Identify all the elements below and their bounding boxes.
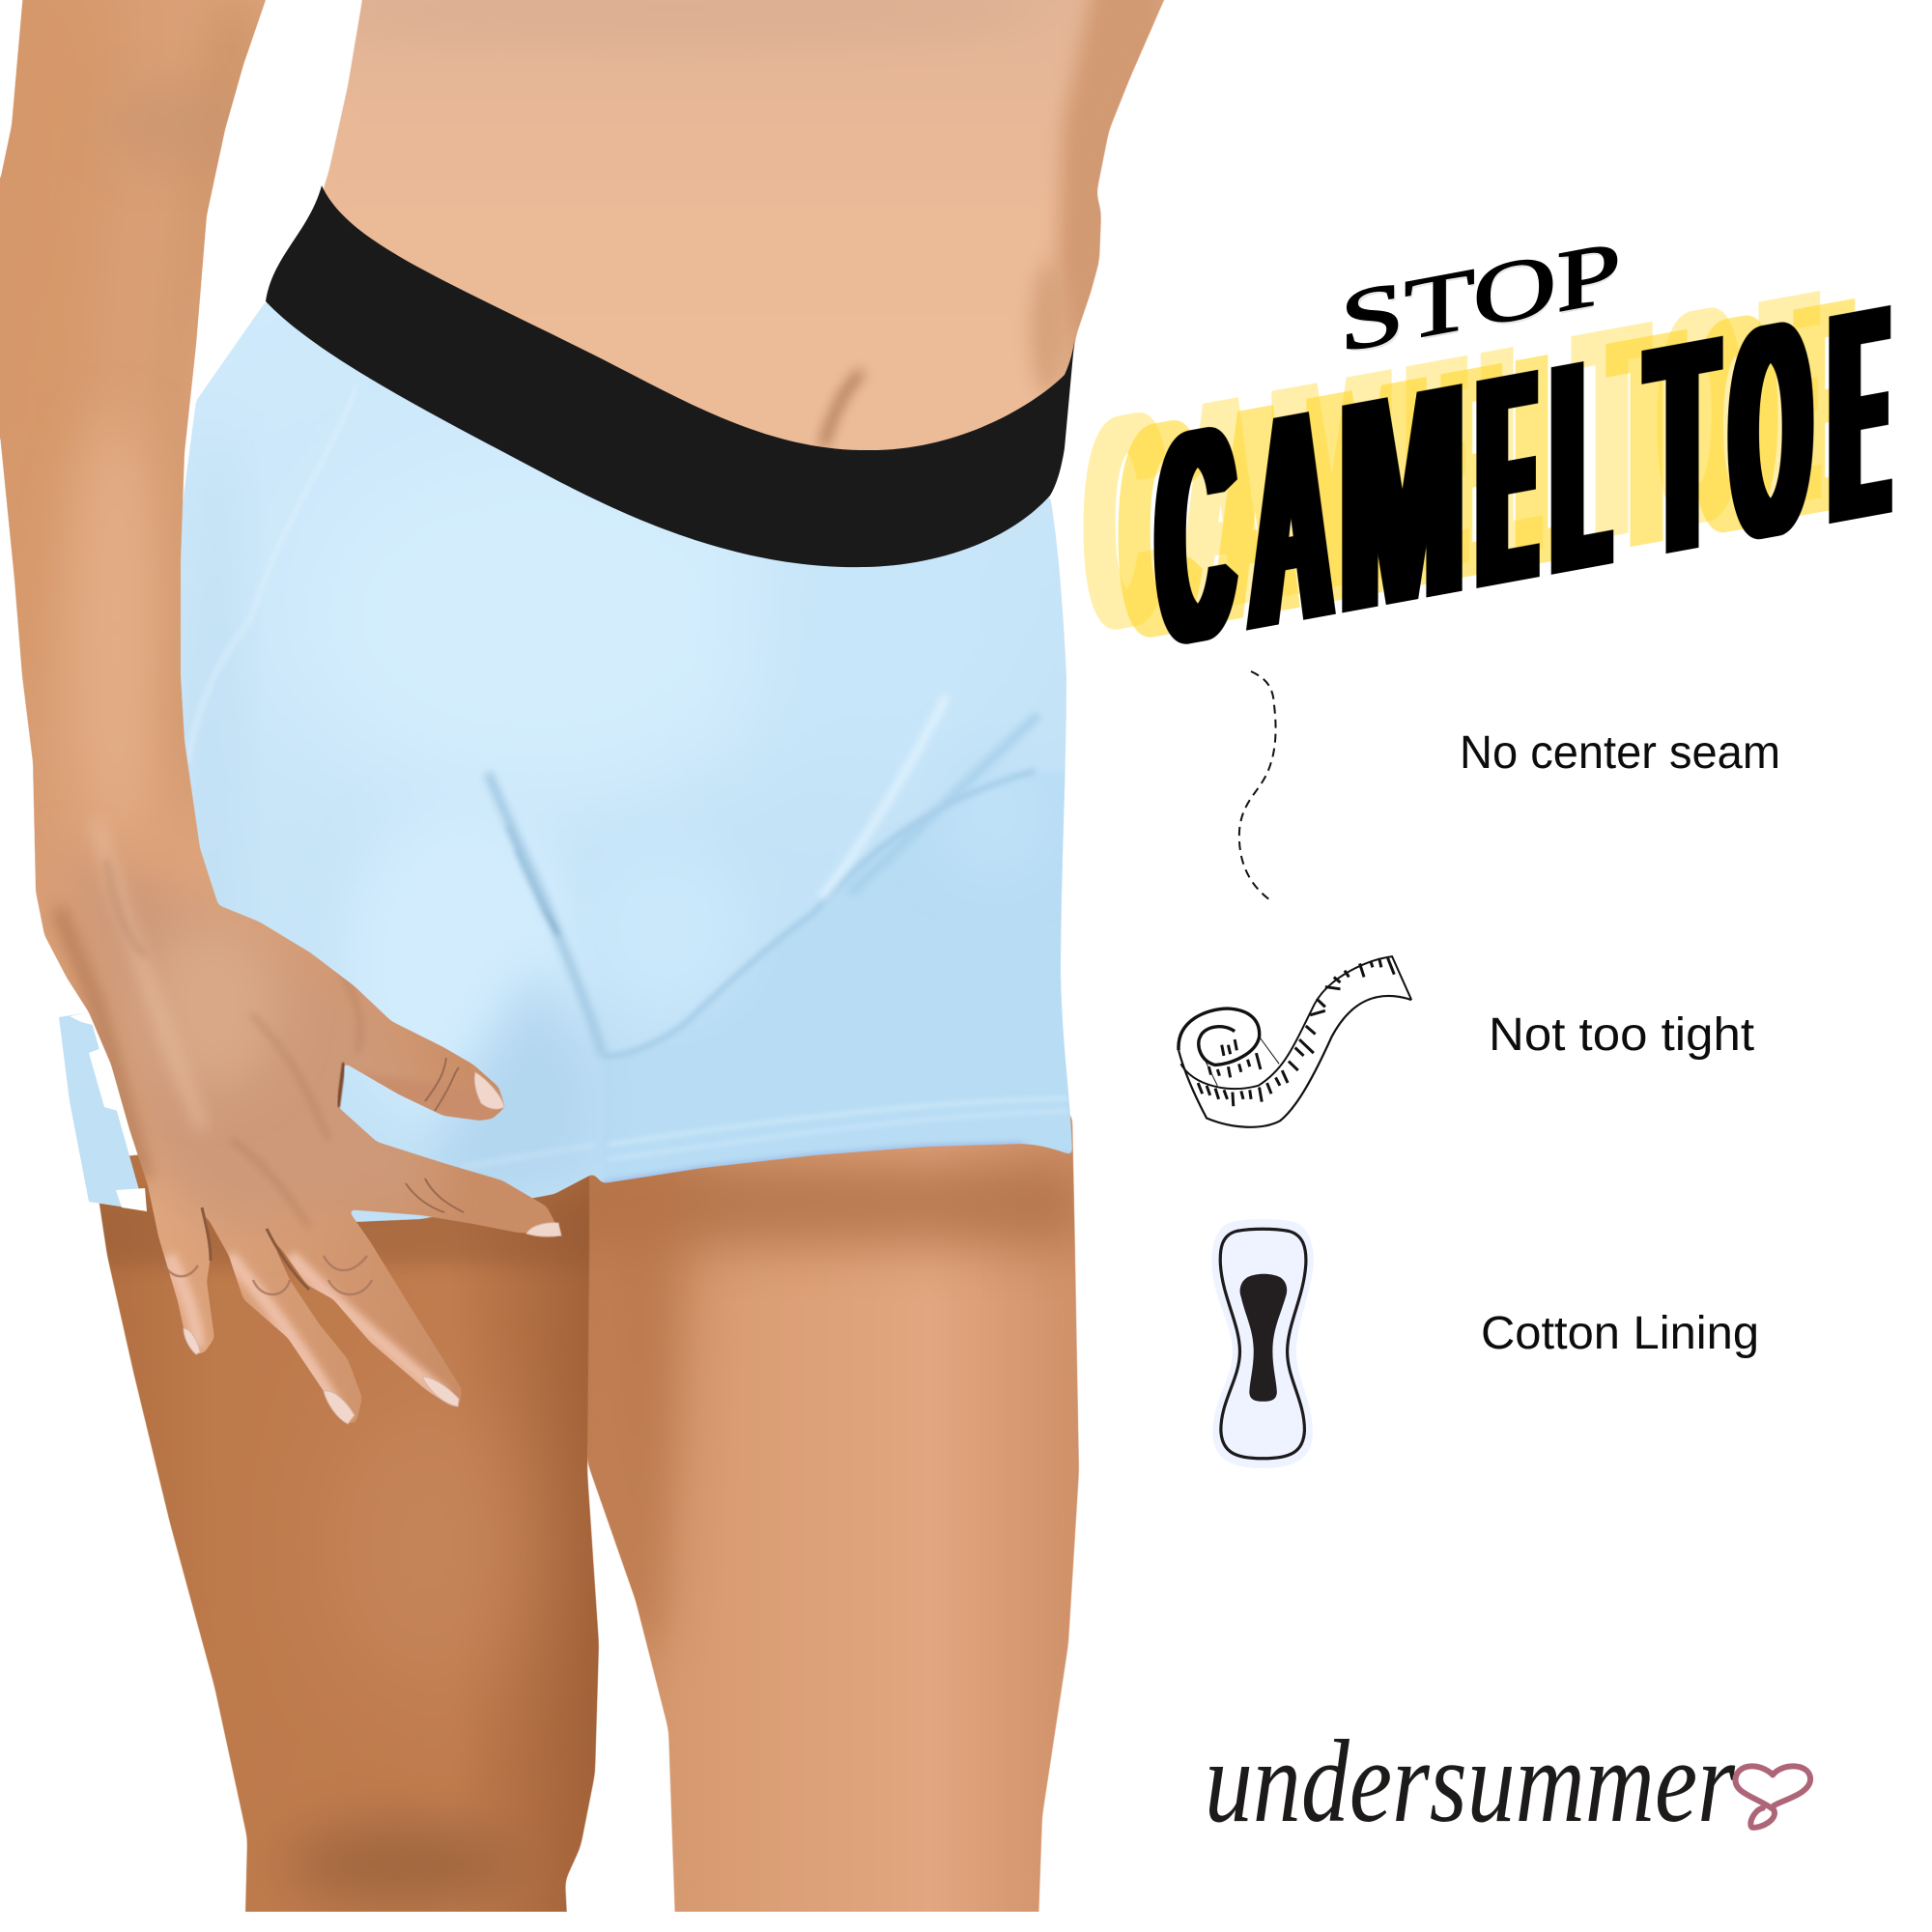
mid yellow echo: T [1613, 265, 1680, 614]
torso [323, 0, 1165, 450]
lightest yellow echo: E [1411, 291, 1462, 637]
word: STOP: STOP [1343, 225, 1621, 373]
fingernails [184, 1072, 561, 1424]
lightest yellow echo: A [1181, 327, 1260, 679]
word: CAMEL TOE [1158, 241, 1885, 711]
panel: product photo [0, 0, 1198, 1932]
lightest yellow echo: C [1088, 346, 1162, 696]
mid yellow echo: C [1122, 354, 1197, 704]
word: STOP: STOP [1340, 222, 1621, 371]
shorts: main body [174, 301, 1072, 1222]
arm and hand [0, 0, 561, 1424]
lightest yellow echo [1088, 226, 1814, 696]
logo: undersummer: undersummer [1205, 1717, 1735, 1847]
lightest yellow echo: O [1662, 240, 1739, 591]
mid yellow echo [1122, 234, 1849, 704]
heading: stop camel toe [1088, 222, 1885, 711]
word: STOP [1340, 222, 1621, 374]
lightest yellow echo: L [1486, 277, 1535, 623]
right thigh [580, 1111, 1082, 1932]
shorts: rear leg panel [59, 1012, 147, 1211]
word: CAMEL TOE: L [1556, 292, 1605, 638]
hem stitching [609, 1098, 1067, 1145]
mid yellow echo: A [1216, 335, 1294, 687]
navel crease [823, 372, 862, 446]
word: CAMEL TOE: E [1482, 305, 1532, 651]
fold lines [488, 773, 603, 1056]
mid yellow echo: E [1446, 298, 1496, 644]
mid yellow echo: L [1520, 285, 1570, 631]
word: CAMEL TOE: C [1158, 360, 1233, 711]
icon: cotton lining pad [1211, 1219, 1314, 1468]
waistband [266, 185, 1075, 567]
icon: dashed seam line [1239, 671, 1276, 902]
word: CAMEL TOE: M [1341, 318, 1463, 677]
right leg shadow panel [603, 771, 1072, 1188]
label: cotton lining: Cotton Lining [1481, 1308, 1759, 1359]
label: no center seam: No center seam [1460, 727, 1780, 779]
lightest yellow echo: T [1578, 257, 1645, 607]
label: not too tight: Not too tight [1489, 1009, 1754, 1061]
left leg lower shading [436, 975, 595, 1198]
photo bottom edge [0, 1912, 1159, 1932]
left thigh [99, 1154, 599, 1912]
icon: logo heart [1735, 1766, 1810, 1828]
finger creases and gaps [164, 1058, 464, 1294]
back of hand [81, 877, 436, 1215]
crotch panel highlight [589, 845, 744, 1009]
word: CAMEL TOE: T [1649, 271, 1716, 621]
lightest yellow echo: M [1270, 303, 1393, 663]
side seam [187, 605, 255, 759]
mid yellow echo: O [1696, 247, 1774, 599]
finger shading [348, 1072, 502, 1125]
word: CAMEL TOE: A [1252, 342, 1330, 694]
mid yellow echo: M [1305, 311, 1428, 670]
icon: measuring tape [1179, 956, 1411, 1127]
hem underside [603, 1144, 1072, 1183]
knuckle and tendon marks [106, 860, 360, 1227]
